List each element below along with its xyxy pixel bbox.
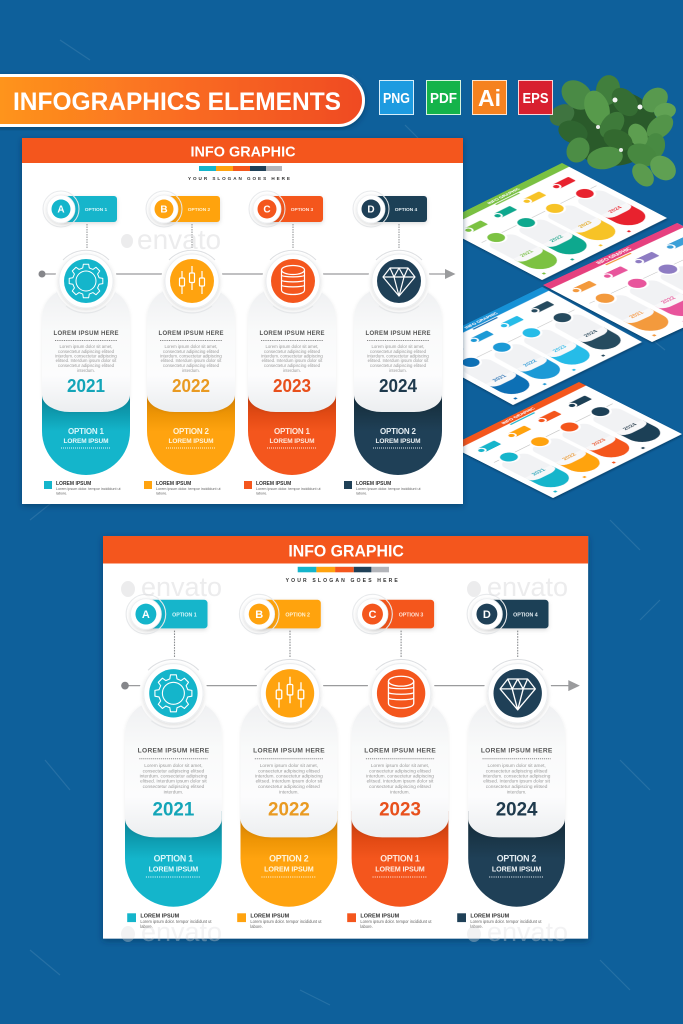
card and year <box>125 701 222 907</box>
option tag B: OPTION 2 <box>285 612 310 618</box>
icon: sliders <box>161 250 223 313</box>
card and year: elitsed. Interdum ipsum dolor sit <box>256 778 323 784</box>
legend 4 <box>344 481 421 496</box>
option tag D: D <box>483 609 491 621</box>
card and year: interdum. consectetur adipiscing <box>483 773 551 779</box>
legend 1 <box>44 481 121 496</box>
option tag D: OPTION 4 <box>513 612 538 618</box>
header bar: INFO GRAPHIC <box>288 542 404 560</box>
watermark: bottom panel right: envato <box>487 572 568 602</box>
legend 1 <box>127 913 212 929</box>
card and year: interdum. <box>389 368 407 373</box>
legend 2: Lorem ipsum dolor. tempor incididunt ut <box>156 487 221 491</box>
panel: pink isometric preview: 2022 <box>660 296 678 305</box>
card and year: interdum. consectetur adipiscing <box>140 773 208 779</box>
card and year: interdum. <box>283 368 301 373</box>
icon: PNG <box>380 80 414 114</box>
card and year: interdum. consectetur adipiscing <box>366 773 434 779</box>
card and year: interdum. consectetur adipiscing <box>261 354 323 358</box>
card and year: LOREM IPSUM <box>376 438 420 445</box>
card and year: interdum. <box>279 789 299 795</box>
card and year: OPTION 1 <box>274 427 311 436</box>
panel: pink isometric preview <box>543 223 683 342</box>
card and year: LOREM IPSUM <box>375 865 425 874</box>
colour strip <box>199 166 282 171</box>
card and year: elitsed. Interdum ipsum dolor sit <box>161 358 222 363</box>
card and year <box>354 288 442 475</box>
card and year: interdum. <box>182 368 200 373</box>
legend 4: LOREM IPSUM <box>356 481 391 487</box>
card and year: elitsed. Interdum ipsum dolor sit <box>483 778 551 784</box>
card and year: LOREM IPSUM <box>492 865 541 874</box>
card and year: consectetur adipiscing elitsed <box>486 784 548 790</box>
option tag B <box>239 594 321 657</box>
timeline arrow <box>121 680 580 691</box>
legend 2: labore. <box>156 492 167 496</box>
card and year: 2022 <box>268 798 310 820</box>
panel: blue isometric preview: 2024 <box>583 329 601 338</box>
legend 2 <box>144 481 221 496</box>
card and year: Lorem ipsum dolor sit amet, <box>371 763 429 769</box>
legend 1: labore. <box>140 924 153 929</box>
card and year: LOREM IPSUM HERE <box>260 331 324 337</box>
card and year: OPTION 2 <box>269 854 309 864</box>
icon: gear <box>55 250 117 313</box>
card and year: LOREM IPSUM HERE <box>481 748 553 755</box>
card and year: 2021 <box>67 376 105 396</box>
card and year: LOREM IPSUM <box>168 438 214 445</box>
card and year: LOREM IPSUM HERE <box>54 331 118 337</box>
panel: green isometric preview: 2021 <box>519 249 536 258</box>
icon: diamond <box>484 659 552 729</box>
legend 1: labore. <box>56 492 67 496</box>
panel: orange isometric preview: INFO GRAPHIC <box>500 407 538 425</box>
option tag A: OPTION 1 <box>85 207 108 213</box>
icon: PNG: PNG <box>383 90 410 107</box>
watermark: panel foot right: envato <box>487 917 568 947</box>
card and year: LOREM IPSUM HERE <box>366 331 430 337</box>
legend 4: Lorem ipsum dolor. tempor incididunt ut <box>356 487 421 491</box>
legend 3 <box>244 481 321 496</box>
card and year: Lorem ipsum dolor sit amet, <box>144 763 203 769</box>
header bar <box>103 536 588 564</box>
panel: orange isometric preview <box>450 382 682 498</box>
card and year: consectetur adipiscing elitsed <box>258 769 320 775</box>
panel: green isometric preview: 2023 <box>577 221 594 229</box>
card and year: elitsed. Interdum ipsum dolor sit <box>262 358 323 363</box>
card and year: LOREM IPSUM HERE <box>364 748 436 755</box>
panel: blue isometric preview: 2022 <box>523 359 539 368</box>
card and year: consectetur adipiscing elitsed <box>58 363 115 368</box>
card and year: elitsed. Interdum ipsum dolor sit <box>368 358 429 363</box>
card and year: Lorem ipsum dolor sit amet, <box>59 344 113 349</box>
card and year: LOREM IPSUM HERE <box>253 748 325 755</box>
card and year: Lorem ipsum dolor sit amet, <box>487 763 546 769</box>
slogan: YOUR SLOGAN GOES HERE <box>188 176 290 181</box>
column 4 <box>457 594 565 929</box>
card and year <box>42 288 130 475</box>
legend 4 <box>457 913 542 929</box>
panel: blue isometric preview: 2023 <box>552 345 569 353</box>
title banner: INFOGRAPHICS ELEMENTS <box>13 88 341 116</box>
card and year: 2024 <box>379 376 417 396</box>
panel: orange isometric preview: 2023 <box>591 438 608 447</box>
legend 3: labore. <box>256 492 267 496</box>
card and year: consectetur adipiscing elitsed <box>369 784 431 790</box>
card and year: consectetur adipiscing elitsed <box>58 349 115 354</box>
card and year: OPTION 1 <box>68 427 105 436</box>
card and year: 2024 <box>496 798 538 820</box>
legend 4: LOREM IPSUM <box>470 914 510 920</box>
option tag B: B <box>255 609 263 621</box>
card and year: LOREM IPSUM <box>149 865 198 874</box>
card and year: consectetur adipiscing elitsed <box>143 769 205 775</box>
option tag C: OPTION 3 <box>399 612 423 618</box>
legend 1: LOREM IPSUM <box>56 481 91 487</box>
legend 3: Lorem ipsum dolor. tempor incididunt ut <box>360 919 432 924</box>
option tag D <box>353 191 427 248</box>
header bar <box>22 138 463 163</box>
card and year: consectetur adipiscing elitsed <box>369 769 431 775</box>
card and year: Lorem ipsum dolor sit amet, <box>371 344 425 349</box>
panel: blue isometric preview: 2021 <box>492 374 509 383</box>
card and year: Lorem ipsum dolor sit amet, <box>265 344 319 349</box>
card and year: 2023 <box>379 798 421 820</box>
column 4 <box>344 191 442 496</box>
option tag C: C <box>369 609 377 621</box>
title banner <box>0 76 364 126</box>
watermark: top panel: envato <box>137 224 221 255</box>
card and year: LOREM IPSUM <box>264 865 314 874</box>
option tag B: B <box>160 204 168 216</box>
panel: top infographic <box>22 138 463 504</box>
card and year: LOREM IPSUM <box>270 438 314 445</box>
card and year: interdum. <box>507 789 526 795</box>
card and year: consectetur adipiscing elitsed <box>486 769 548 775</box>
card and year: consectetur adipiscing elitsed <box>264 363 321 368</box>
icon: coins <box>367 659 435 729</box>
card and year: OPTION 2 <box>497 854 536 864</box>
legend 4: Lorem ipsum dolor. tempor incididunt ut <box>470 919 542 924</box>
panel: green isometric preview: 2024 <box>607 205 625 214</box>
card and year: interdum. consectetur adipiscing <box>160 354 222 358</box>
icon: EPS: EPS <box>522 90 548 107</box>
card and year: consectetur adipiscing elitsed <box>163 363 220 368</box>
panel: orange isometric preview: 2022 <box>562 453 579 461</box>
card and year <box>352 701 448 907</box>
option tag D <box>467 594 548 657</box>
card and year: consectetur adipiscing elitsed <box>258 784 320 790</box>
card and year: consectetur adipiscing elitsed <box>370 349 427 354</box>
panel: blue isometric preview: INFO GRAPHIC <box>463 311 501 330</box>
card and year: 2022 <box>172 376 210 396</box>
panel: orange isometric preview: 2021 <box>531 468 549 477</box>
card and year: Lorem ipsum dolor sit amet, <box>164 344 218 349</box>
card and year: Lorem ipsum dolor sit amet, <box>260 763 318 769</box>
colour strip <box>298 567 389 572</box>
panel: green isometric preview <box>437 163 667 280</box>
icon: sliders <box>256 659 324 729</box>
option tag A: OPTION 1 <box>172 612 197 618</box>
card and year: elitsed. Interdum ipsum dolor sit <box>56 358 117 363</box>
legend 3: LOREM IPSUM <box>360 914 400 920</box>
panel: blue isometric preview <box>413 287 642 405</box>
icon: PDF: PDF <box>430 90 457 107</box>
column 3 <box>347 594 448 929</box>
option tag A: A <box>142 609 150 621</box>
card and year: consectetur adipiscing elitsed <box>143 784 205 790</box>
watermark: panel foot left: envato <box>141 917 222 947</box>
option tag C <box>353 594 434 657</box>
legend 2: Lorem ipsum dolor. tempor incididunt ut <box>250 919 322 924</box>
legend 3: LOREM IPSUM <box>256 481 291 487</box>
timeline arrow <box>38 269 456 279</box>
panel: orange isometric preview: 2024 <box>622 423 640 431</box>
option tag A <box>43 191 117 248</box>
icon: diamond <box>368 250 430 313</box>
legend 2: LOREM IPSUM <box>250 914 290 920</box>
card and year <box>248 288 336 475</box>
legend 2: LOREM IPSUM <box>156 481 191 487</box>
card and year: OPTION 2 <box>173 427 210 436</box>
icon: Ai <box>472 80 506 114</box>
card and year <box>240 701 337 907</box>
card and year: consectetur adipiscing elitsed <box>163 349 220 354</box>
icon: gear <box>139 659 208 729</box>
card and year <box>147 288 235 475</box>
icon: PDF <box>426 80 460 114</box>
legend 3: labore. <box>360 924 373 929</box>
column 1 <box>125 594 222 929</box>
card and year: elitsed. Interdum ipsum dolor sit <box>140 778 207 784</box>
card and year: LOREM IPSUM HERE <box>138 748 210 755</box>
slogan: YOUR SLOGAN GOES HERE <box>286 578 398 584</box>
header bar: INFO GRAPHIC <box>190 144 296 160</box>
watermark: bottom panel left: envato <box>141 572 222 602</box>
panel: bottom infographic <box>103 536 588 939</box>
column 2 <box>237 594 337 929</box>
card and year: OPTION 1 <box>154 854 193 864</box>
column 3 <box>244 191 336 496</box>
legend 2: labore. <box>250 924 263 929</box>
option tag C: OPTION 3 <box>291 207 314 213</box>
legend 4: labore. <box>356 492 367 496</box>
panel: green isometric preview: INFO GRAPHIC <box>486 187 523 205</box>
card and year: interdum. consectetur adipiscing <box>55 354 117 358</box>
option tag B: OPTION 2 <box>188 207 211 213</box>
option tag D: OPTION 4 <box>395 207 418 213</box>
option tag B <box>146 191 220 248</box>
legend 3: Lorem ipsum dolor. tempor incididunt ut <box>256 487 321 491</box>
card and year: 2021 <box>153 798 194 820</box>
column 1 <box>42 191 130 496</box>
legend 3 <box>347 913 432 929</box>
card and year: interdum. consectetur adipiscing <box>367 354 429 358</box>
option tag C <box>249 191 323 248</box>
card and year: interdum. <box>164 789 183 795</box>
panel: pink isometric preview: 2021 <box>628 311 647 319</box>
legend 1: LOREM IPSUM <box>140 914 180 920</box>
card and year: interdum. <box>77 368 95 373</box>
card and year: interdum. consectetur adipiscing <box>255 773 323 779</box>
icon: Ai: Ai <box>478 85 501 111</box>
legend 4: labore. <box>470 924 483 929</box>
option tag D: D <box>367 204 375 216</box>
card and year: OPTION 1 <box>380 854 420 864</box>
card and year: LOREM IPSUM <box>64 438 108 445</box>
card and year: interdum. <box>390 789 410 795</box>
card and year: OPTION 2 <box>380 427 417 436</box>
card and year: LOREM IPSUM HERE <box>158 331 224 337</box>
panel: pink isometric preview: INFO GRAPHIC <box>595 247 634 265</box>
icon: coins <box>262 250 324 313</box>
legend 2 <box>237 913 322 929</box>
card and year: consectetur adipiscing elitsed <box>370 363 427 368</box>
legend 1: Lorem ipsum dolor. tempor incididunt ut <box>140 919 212 924</box>
option tag C: C <box>263 204 271 216</box>
card and year: 2023 <box>273 376 311 396</box>
option tag A: A <box>57 204 65 216</box>
icon: EPS <box>518 80 552 114</box>
card and year: consectetur adipiscing elitsed <box>264 349 321 354</box>
card and year <box>468 701 565 907</box>
option tag A <box>126 594 208 657</box>
column 2 <box>144 191 235 496</box>
plant <box>546 73 681 191</box>
card and year: elitsed. Interdum ipsum dolor sit <box>367 778 434 784</box>
panel: green isometric preview: 2022 <box>549 235 565 243</box>
legend 1: Lorem ipsum dolor. tempor incididunt ut <box>56 487 121 491</box>
